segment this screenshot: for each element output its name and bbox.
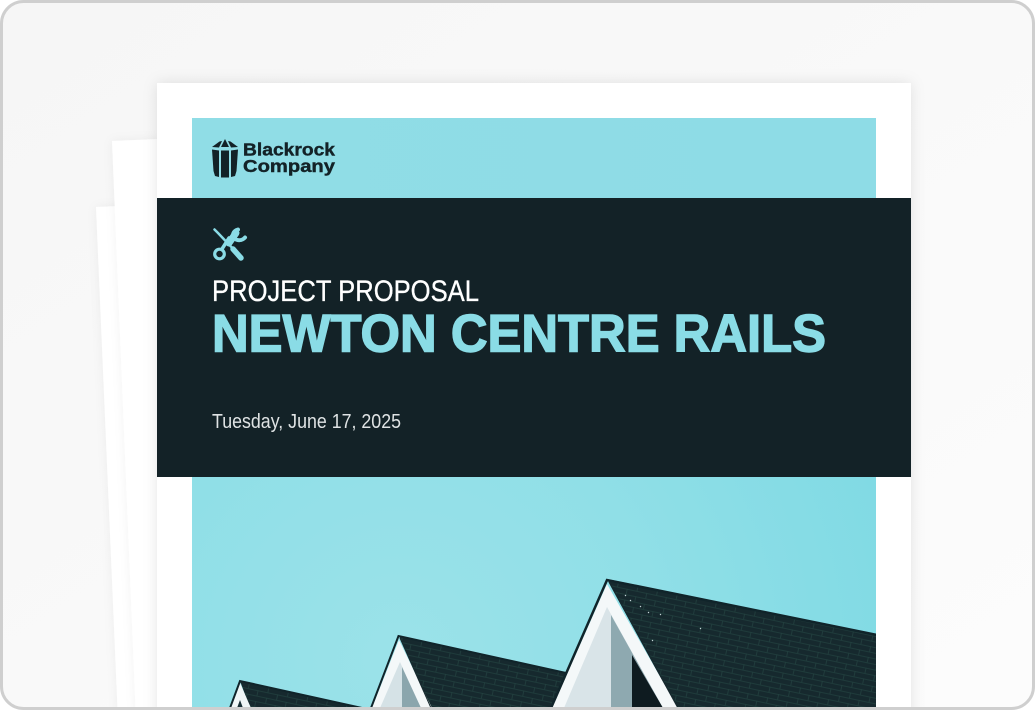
main sheet — [157, 83, 911, 711]
logo text: Company — [243, 156, 335, 176]
photo: rooftops — [192, 477, 877, 708]
sky — [192, 477, 876, 707]
icon: gem logo — [212, 139, 238, 178]
dark title band — [157, 198, 911, 477]
sky strip top — [192, 118, 876, 198]
icon: crossed tools — [214, 230, 245, 259]
small roof — [230, 681, 362, 708]
logo text: Blackrock — [243, 140, 335, 160]
title: NEWTON CENTRE RAILS — [212, 304, 826, 364]
paper stack — [96, 83, 911, 711]
back sheet: lower — [96, 200, 285, 711]
large roof — [551, 579, 877, 708]
back sheet: upper — [112, 141, 157, 206]
subtitle: PROJECT PROPOSAL — [212, 275, 479, 308]
date: Tuesday, June 17, 2025 — [212, 411, 401, 433]
middle roof — [371, 636, 566, 708]
logo text — [243, 140, 335, 176]
